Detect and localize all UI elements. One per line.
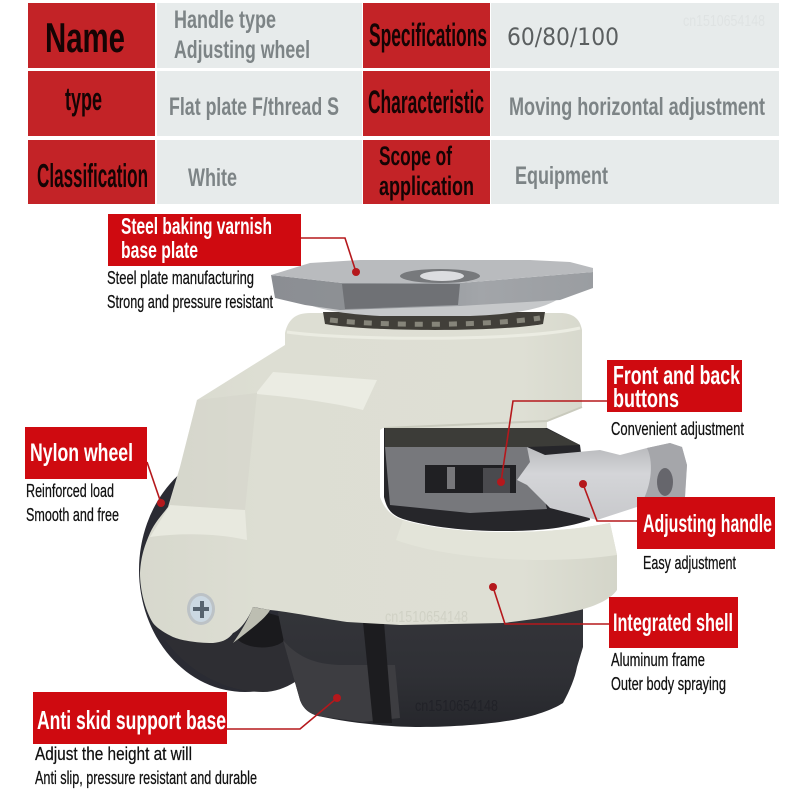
row: characteristic: Characteristic (368, 84, 484, 120)
hub recess near wheel (233, 607, 270, 643)
row: specifications: Specifications (369, 17, 487, 53)
plate edge (271, 272, 593, 310)
callout: integrated shell (489, 583, 738, 694)
side plane shading (170, 393, 257, 510)
row: scope of application: application (379, 171, 474, 201)
callout: adjusting handle (579, 480, 775, 573)
product: leveling caster (139, 260, 687, 727)
callout: anti skid support base (33, 692, 341, 788)
bearing ring (323, 312, 545, 330)
callout: nylon wheel: Smooth and free (26, 505, 119, 525)
side screw (187, 593, 215, 625)
callout: integrated shell: Aluminum frame (611, 650, 705, 670)
front and back button slot (425, 465, 516, 493)
leader line (497, 401, 607, 486)
row: classification (28, 140, 362, 204)
upper facet highlight (257, 372, 377, 410)
callout: nylon wheel: Reinforced load (26, 481, 114, 501)
callout: integrated shell: Outer body spraying (611, 674, 726, 694)
callout: front and back buttons: buttons (613, 383, 679, 413)
callout: steel baking varnish base plate: Steel baking varnish (121, 213, 272, 239)
interior cavity (384, 428, 590, 531)
row: characteristic (363, 71, 779, 136)
callout: integrated shell: Integrated shell (613, 609, 733, 637)
row: specifications: 60/80/100 (507, 23, 619, 51)
callout: steel baking varnish base plate: Steel plate manufacturing (107, 268, 254, 288)
collar lower shadow (384, 407, 582, 428)
top ring shading (287, 328, 580, 338)
adjusting handle (385, 428, 687, 520)
row: name: Handle type (174, 6, 276, 34)
cream housing (140, 313, 617, 643)
callout: steel baking varnish base plate: Strong and pressure resistant (107, 292, 273, 312)
row: specifications: cn1510654148 (683, 13, 765, 30)
callout: steel baking varnish base plate (107, 213, 360, 312)
callout: nylon wheel (25, 427, 165, 525)
spec table (28, 3, 779, 204)
leader line (301, 238, 360, 276)
lower ring highlight (396, 520, 617, 560)
leader line (147, 462, 165, 507)
callout: front and back buttons: Front and back (613, 360, 740, 390)
row: classification: White (188, 164, 237, 192)
callout: front and back buttons: Convenient adjustment (611, 419, 744, 439)
callout: steel baking varnish base plate: base plate (121, 237, 198, 263)
leader line (579, 480, 637, 521)
callout: anti skid support base: Anti skid support base (37, 705, 226, 735)
row: scope of application: Scope of (379, 141, 453, 171)
row: specifications (363, 3, 779, 68)
plate underside (300, 298, 560, 316)
anti skid support base (277, 600, 583, 727)
callout: anti skid support base: Anti slip, pressure resistant and durable (35, 768, 257, 788)
callout: nylon wheel: Nylon wheel (30, 439, 133, 467)
row: scope of application (363, 140, 779, 204)
row: name: Adjusting wheel (174, 36, 310, 64)
row: scope of application: Equipment (515, 162, 608, 190)
anti skid support base: cn1510654148 (415, 698, 498, 715)
callout: anti skid support base: Adjust the height at will (35, 744, 192, 764)
lower facet highlight (150, 505, 247, 540)
plate hub (400, 269, 480, 283)
steel base plate (271, 260, 593, 316)
plate top surface (271, 260, 593, 283)
leader line (227, 694, 341, 729)
row: name: Name (45, 14, 125, 61)
callout: front and back buttons (497, 360, 744, 486)
nylon wheel (139, 448, 351, 692)
watermark: cn1510654148 (385, 609, 468, 626)
row: type: type (65, 81, 102, 117)
row: type: Flat plate F/thread S (169, 93, 339, 121)
row: name (28, 3, 362, 68)
callout: adjusting handle: Easy adjustment (643, 553, 736, 573)
row: classification: Classification (37, 157, 148, 194)
leader line (489, 583, 609, 624)
handle hole (657, 468, 673, 496)
row: type (28, 71, 362, 136)
